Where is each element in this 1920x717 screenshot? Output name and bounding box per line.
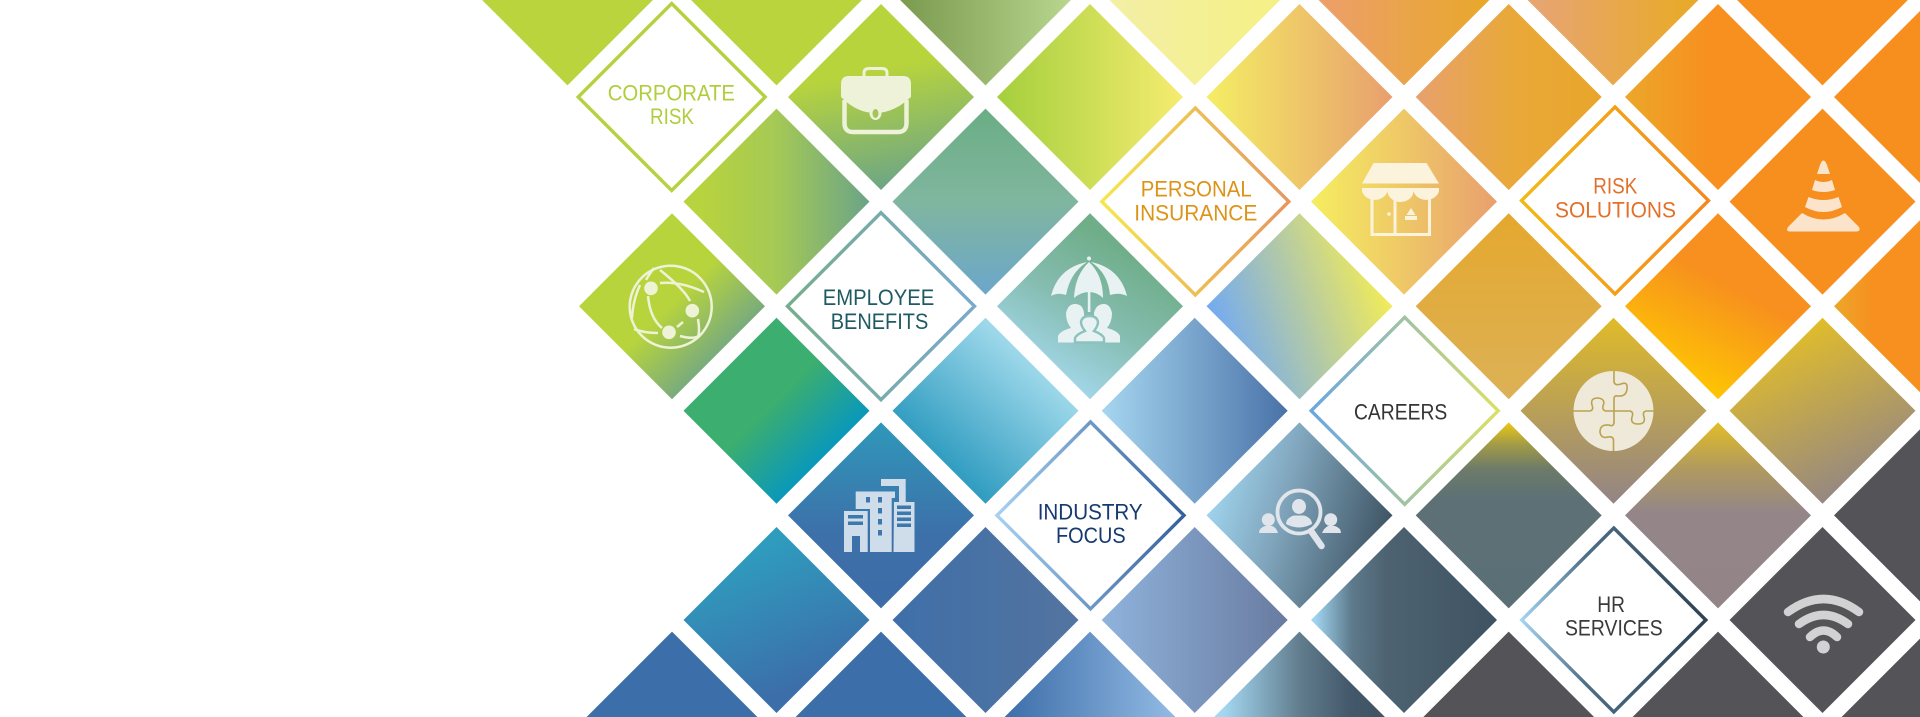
tile: steel blue <box>892 527 1078 713</box>
label: risk solutions: SOLUTIONS <box>1555 197 1676 222</box>
tile: light blue to dark slate <box>1311 527 1497 713</box>
label: industry focus: FOCUS <box>1056 523 1126 548</box>
tile: bottom row light blue to slate <box>1214 632 1385 717</box>
tile with icon: umbrella and family <box>997 213 1183 399</box>
tile: top row pale yellow <box>1109 0 1280 85</box>
tile: top row salmon to amber <box>1319 0 1489 85</box>
tile: light blue to teal <box>892 318 1078 504</box>
tile: top row green <box>691 0 862 85</box>
tile: pale blue to mid blue <box>1102 318 1288 504</box>
tile: yellow to orange glow <box>1625 213 1811 399</box>
icon: wifi signal <box>1788 599 1859 654</box>
tile: amber to slate <box>1416 422 1602 608</box>
label: corporate risk <box>578 4 765 190</box>
label: risk solutions <box>1522 107 1708 294</box>
label: personal insurance: INSURANCE <box>1134 201 1257 226</box>
tile: right edge dark grey <box>1834 429 1920 601</box>
tile: amber to grey diagonal <box>1730 318 1916 504</box>
tile: top row orange <box>1737 0 1908 85</box>
tile: amber to orange <box>1625 4 1811 190</box>
icon: shop front <box>1362 163 1439 234</box>
label: corporate risk: CORPORATE <box>608 81 735 106</box>
tile with icon: people search <box>1206 422 1392 608</box>
tile: right edge orange <box>1834 11 1920 183</box>
tile with icon: traffic cone <box>1730 109 1916 295</box>
tile: green to teal gradient <box>684 109 870 295</box>
tile: right edge amber <box>1834 220 1920 392</box>
tile: top row corner triangle <box>482 0 653 85</box>
icon: network globe <box>630 266 712 348</box>
tile: bottom row blue left <box>587 632 757 717</box>
label: industry focus <box>997 422 1184 609</box>
tile: pale blue to slate violet <box>1102 527 1288 713</box>
tile: green to blue <box>684 318 870 504</box>
tile with icon: office buildings <box>788 422 974 608</box>
tile: teal to blue <box>892 109 1078 295</box>
label: industry focus: INDUSTRY <box>1038 499 1143 524</box>
icon: briefcase <box>841 68 911 132</box>
label: personal insurance: PERSONAL <box>1141 177 1252 202</box>
label: hr services: HR <box>1597 592 1625 617</box>
icon: puzzle circle <box>1574 371 1654 451</box>
tile: salmon to amber <box>1416 4 1602 190</box>
label: hr services: SERVICES <box>1565 615 1663 640</box>
label: employee benefits <box>788 213 974 400</box>
label: careers: CAREERS <box>1354 400 1447 425</box>
tile: bottom row dark grey <box>1423 632 1594 717</box>
tile: bottom row blue <box>796 632 966 717</box>
icon: office buildings <box>844 479 914 552</box>
label: corporate risk: RISK <box>650 104 694 129</box>
icon: traffic cone <box>1787 160 1860 232</box>
tile: top row salmon amber <box>1528 0 1698 85</box>
tile: teal to blue <box>684 527 870 713</box>
tile: yellow to salmon <box>1206 4 1392 190</box>
tile with icon: wifi <box>1730 527 1916 713</box>
label: risk solutions: RISK <box>1593 173 1638 198</box>
tile with icon: globe network <box>579 213 765 399</box>
tile with icon: briefcase <box>788 4 974 190</box>
label: employee benefits: BENEFITS <box>831 309 928 334</box>
icon: magnifier with people <box>1259 490 1341 546</box>
icon: umbrella over people <box>1051 256 1127 342</box>
tile: green to yellow <box>997 4 1183 190</box>
tile with icon: puzzle <box>1520 318 1706 504</box>
tile: bottom row dark grey middle <box>1633 632 1803 717</box>
tile: blue to yellow diagonal <box>1206 213 1392 399</box>
tile: bottom row blue to pale blue <box>1005 632 1175 717</box>
label: hr services <box>1522 528 1706 712</box>
label: careers <box>1311 317 1498 504</box>
tile: right edge bottom dark grey <box>1842 639 1920 717</box>
label: personal insurance <box>1102 108 1289 295</box>
tile with icon: shop <box>1311 109 1497 295</box>
tile: amber to taupe <box>1625 422 1811 608</box>
label: employee benefits: EMPLOYEE <box>823 285 934 310</box>
tile: top row olive to pale green <box>900 0 1071 85</box>
tile: muted amber <box>1416 213 1602 399</box>
